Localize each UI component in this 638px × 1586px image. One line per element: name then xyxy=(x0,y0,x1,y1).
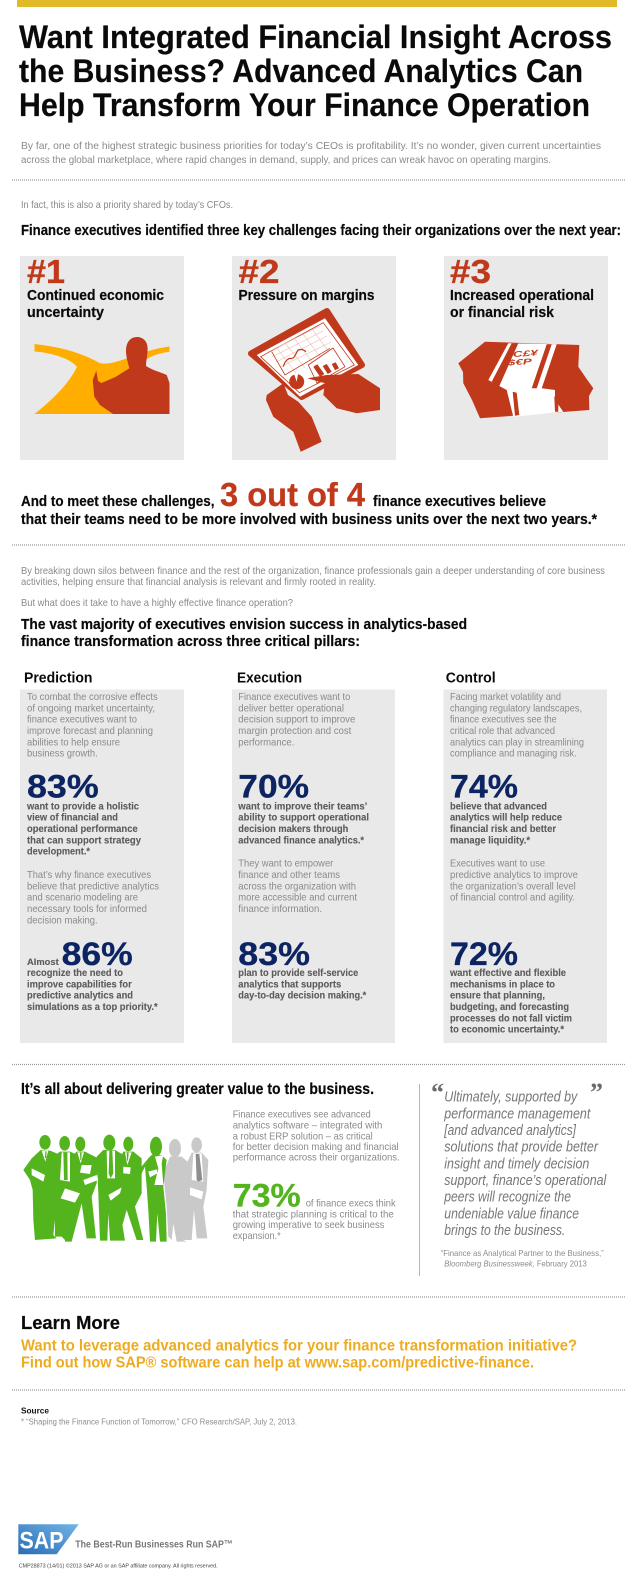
Control intro: changing regulatory landscapes, xyxy=(450,702,582,714)
self-service description xyxy=(238,967,367,1002)
quote citation: Bloomberg Businessweek, February 2013 xyxy=(444,1259,587,1269)
top accent bar xyxy=(17,0,617,7)
challenge 2 label: Pressure on margins xyxy=(238,288,374,304)
83% description: view of financial and xyxy=(27,812,118,824)
Execution body: across the organization with xyxy=(238,880,356,892)
74% description: financial risk and better xyxy=(450,823,556,835)
logo: SAP: SAP xyxy=(20,1528,64,1554)
Execution intro: Finance executives want to xyxy=(238,691,350,703)
title: Want Integrated Financial Insight Across xyxy=(19,19,612,55)
silos paragraph: activities, helping ensure that financial analysis is relevant and firmly rooted in reality. xyxy=(21,576,376,588)
Control intro: analytics can play in streamlining xyxy=(450,736,584,748)
panel: Control pillar xyxy=(444,670,607,1043)
analytics paragraph xyxy=(233,1109,400,1164)
Control intro: compliance and managing risk. xyxy=(450,748,577,760)
quote text: insight and timely decision xyxy=(444,1156,589,1172)
self-service description: day-to-day decision making.* xyxy=(238,990,367,1002)
Prediction body xyxy=(27,869,159,926)
title xyxy=(19,19,612,123)
83% description: that can support strategy xyxy=(27,834,141,846)
key statistic sentence: And to meet these challenges, xyxy=(21,494,214,510)
quote text: solutions that provide better xyxy=(444,1140,599,1156)
70% description: ability to support operational xyxy=(238,812,369,824)
Control body: the organization’s overall level xyxy=(450,880,576,892)
closing quote mark: ” xyxy=(590,1078,603,1107)
72% description: to economic uncertainty.* xyxy=(450,1024,565,1036)
stat: 3 out of 4: 3 out of 4 xyxy=(220,476,366,513)
Execution body xyxy=(238,858,357,915)
analytics paragraph: for better decision making and financial xyxy=(233,1141,399,1153)
72% description xyxy=(449,967,572,1036)
intro text: across the global marketplace, where rapid changes in demand, supply, and prices can wreak havoc on operating margins. xyxy=(21,154,551,166)
rank number 1: #1 xyxy=(27,253,65,290)
icon: road and presenter xyxy=(34,337,170,414)
Prediction intro xyxy=(27,691,158,760)
quote text: undeniable value finance xyxy=(444,1206,579,1222)
Prediction intro: of ongoing market uncertainty, xyxy=(27,702,155,714)
tagline: The Best-Run Businesses Run SAP™ xyxy=(75,1539,233,1551)
stat: 74%: 74% xyxy=(450,769,518,805)
70% description xyxy=(237,800,369,846)
key statistic sentence: that their teams need to be more involved with business units over the next two years.* xyxy=(21,512,597,528)
86% description xyxy=(27,967,159,1013)
Control intro xyxy=(450,691,584,760)
stat: almost 86% xyxy=(27,936,133,972)
callout: pull quote xyxy=(419,1078,607,1276)
83% description: operational performance xyxy=(27,823,138,835)
Control intro: Facing market volatility and xyxy=(450,691,561,703)
73% description: that strategic planning is critical to the xyxy=(233,1208,394,1220)
Control body: predictive analytics to improve xyxy=(450,869,578,881)
rank number 3: #3 xyxy=(450,253,491,290)
72% description: budgeting, and forecasting xyxy=(450,1001,569,1013)
Prediction intro: improve forecast and planning xyxy=(27,725,153,737)
key statistic sentence: finance executives believe xyxy=(373,494,546,510)
72% description: ensure that planning, xyxy=(450,990,545,1002)
quote text: brings to the business. xyxy=(444,1223,565,1239)
CFO priority note: In fact, this is also a priority shared by today’s CFOs. xyxy=(21,199,233,211)
83% description: want to provide a holistic xyxy=(26,800,139,812)
Prediction body: That’s why finance executives xyxy=(27,869,151,881)
analytics paragraph: a robust ERP solution – as critical xyxy=(233,1130,373,1142)
72% description: mechanisms in place to xyxy=(450,978,555,990)
quote citation: “Finance as Analytical Partner to the Business,” xyxy=(441,1248,604,1258)
panel: challenge 1 xyxy=(20,253,184,460)
quote text xyxy=(443,1090,607,1239)
illustration: business people silhouettes xyxy=(23,1135,208,1242)
panel: challenge 2 xyxy=(232,253,396,460)
70% description: advanced finance analytics.* xyxy=(238,834,365,846)
challenge 1 label: uncertainty xyxy=(27,305,104,321)
value heading: It’s all about delivering greater value to the business. xyxy=(21,1081,374,1098)
Prediction intro: abilities to help ensure xyxy=(27,736,120,748)
quote text: Ultimately, supported by xyxy=(444,1090,578,1106)
Execution heading: Execution xyxy=(237,670,302,686)
intro text xyxy=(21,140,601,166)
Execution intro: decision support to improve xyxy=(238,714,355,726)
rank number 2: #2 xyxy=(238,253,280,290)
challenge 3 label: or financial risk xyxy=(450,305,555,321)
icon: bundle of currency xyxy=(458,342,593,418)
challenge 1 label: Continued economic xyxy=(27,288,164,304)
source note xyxy=(21,1405,297,1427)
Control body xyxy=(450,858,578,904)
analytics paragraph: analytics software – integrated with xyxy=(233,1120,383,1132)
analytics paragraph: performance across their organizations. xyxy=(233,1152,400,1164)
stat: 70%: 70% xyxy=(238,769,309,805)
Control intro: critical role that advanced xyxy=(450,725,555,737)
73% description xyxy=(233,1198,396,1242)
83% description: development.* xyxy=(27,846,91,858)
stat: 83% self-service: 83% xyxy=(238,936,310,972)
74% description: believe that advanced xyxy=(450,800,547,812)
quote text: peers will recognize the xyxy=(443,1190,571,1206)
Prediction body: believe that predictive analytics xyxy=(27,880,159,892)
source note: Source xyxy=(21,1405,49,1415)
pillars heading xyxy=(21,616,467,650)
Execution intro: performance. xyxy=(238,736,294,748)
Learn More heading: Learn More xyxy=(21,1312,120,1333)
73% description: expansion.* xyxy=(233,1230,281,1242)
Execution intro: deliver better operational xyxy=(238,702,344,714)
silos paragraph xyxy=(21,565,605,609)
panel: Prediction pillar xyxy=(20,670,184,1043)
Execution intro xyxy=(238,691,355,748)
icon: bundle of currency: C£¥ xyxy=(513,348,541,359)
86% description: predictive analytics and xyxy=(27,990,133,1002)
challenge 1 label xyxy=(27,288,164,321)
challenge 3 label: Increased operational xyxy=(450,288,594,304)
74% description xyxy=(450,800,562,846)
Prediction body: and scenario modeling are xyxy=(27,892,138,904)
Prediction body: necessary tools for informed xyxy=(27,903,147,915)
Prediction intro: business growth. xyxy=(27,748,98,760)
73% description: growing imperative to seek business xyxy=(233,1219,384,1231)
panel: challenge 3 xyxy=(444,253,608,460)
quote text: [and advanced analytics] xyxy=(443,1123,577,1139)
call to action: Find out how SAP® software can help at www.sap.com/predictive-finance. xyxy=(21,1354,534,1371)
self-service description: analytics that supports xyxy=(238,978,341,990)
intro text: By far, one of the highest strategic business priorities for today’s CEOs is profitability. It’s no wonder, given current uncertainties xyxy=(21,140,601,152)
quote text: performance management xyxy=(443,1106,591,1122)
icon: tablet with hands xyxy=(251,311,380,452)
Control heading: Control xyxy=(446,670,496,686)
Prediction intro: To combat the corrosive effects xyxy=(27,691,158,703)
Execution body: finance and other teams xyxy=(238,869,340,881)
pillars heading: The vast majority of executives envision success in analytics-based xyxy=(21,616,467,633)
Execution body: more accessible and current xyxy=(238,892,357,904)
copyright: CMP28873 (14/01) ©2013 SAP AG or an SAP affiliate company. All rights reserved. xyxy=(19,1563,218,1570)
72% description: want effective and flexible xyxy=(449,967,566,979)
panel: Execution pillar xyxy=(232,670,395,1043)
Execution body: finance information. xyxy=(238,903,322,915)
Prediction heading: Prediction xyxy=(24,670,92,686)
self-service description: plan to provide self-service xyxy=(238,967,358,979)
86% description: improve capabilities for xyxy=(27,978,132,990)
Execution intro: margin protection and cost xyxy=(238,725,351,737)
Execution body: They want to empower xyxy=(238,858,334,870)
Control intro: finance executives see the xyxy=(450,714,557,726)
opening quote mark: “ xyxy=(431,1078,444,1107)
challenge 3 label xyxy=(450,288,594,321)
stat: almost 86%: 86% xyxy=(62,936,133,972)
key statistic sentence xyxy=(21,476,597,528)
86% description: recognize the need to xyxy=(27,967,123,979)
73% description: of finance execs think xyxy=(306,1198,396,1210)
74% description: analytics will help reduce xyxy=(450,812,562,824)
86% description: simulations as a top priority.* xyxy=(27,1001,159,1013)
call to action xyxy=(21,1338,577,1371)
stat: 73% xyxy=(233,1178,396,1242)
silos paragraph: But what does it take to have a highly effective finance operation? xyxy=(21,597,293,609)
74% description: manage liquidity.* xyxy=(450,834,531,846)
70% description: want to improve their teams’ xyxy=(237,800,367,812)
stat: 73%: 73% xyxy=(233,1178,301,1214)
title: Help Transform Your Finance Operation xyxy=(19,87,590,123)
pillars heading: finance transformation across three critical pillars: xyxy=(21,633,360,650)
quote text: support, finance’s operational xyxy=(444,1173,607,1189)
icon: bundle of currency: $€P xyxy=(506,357,533,368)
72% description: processes do not fall victim xyxy=(450,1012,572,1024)
83% description xyxy=(26,800,141,858)
quote citation xyxy=(441,1248,604,1269)
analytics paragraph: Finance executives see advanced xyxy=(233,1109,371,1121)
title: the Business? Advanced Analytics Can xyxy=(19,53,583,89)
Prediction body: decision making. xyxy=(27,914,98,926)
call to action: Want to leverage advanced analytics for your finance transformation initiative? xyxy=(21,1338,577,1355)
source note: * “Shaping the Finance Function of Tomorrow,” CFO Research/SAP, July 2, 2013. xyxy=(21,1418,297,1427)
stat: 83%: 83% xyxy=(27,769,99,805)
Control body: Executives want to use xyxy=(450,858,545,870)
stat: almost 86%: Almost xyxy=(27,957,59,967)
Prediction intro: finance executives want to xyxy=(27,714,137,726)
Control body: of financial control and agility. xyxy=(450,892,575,904)
70% description: decision makers through xyxy=(238,823,348,835)
stat: 72%: 72% xyxy=(450,936,518,972)
